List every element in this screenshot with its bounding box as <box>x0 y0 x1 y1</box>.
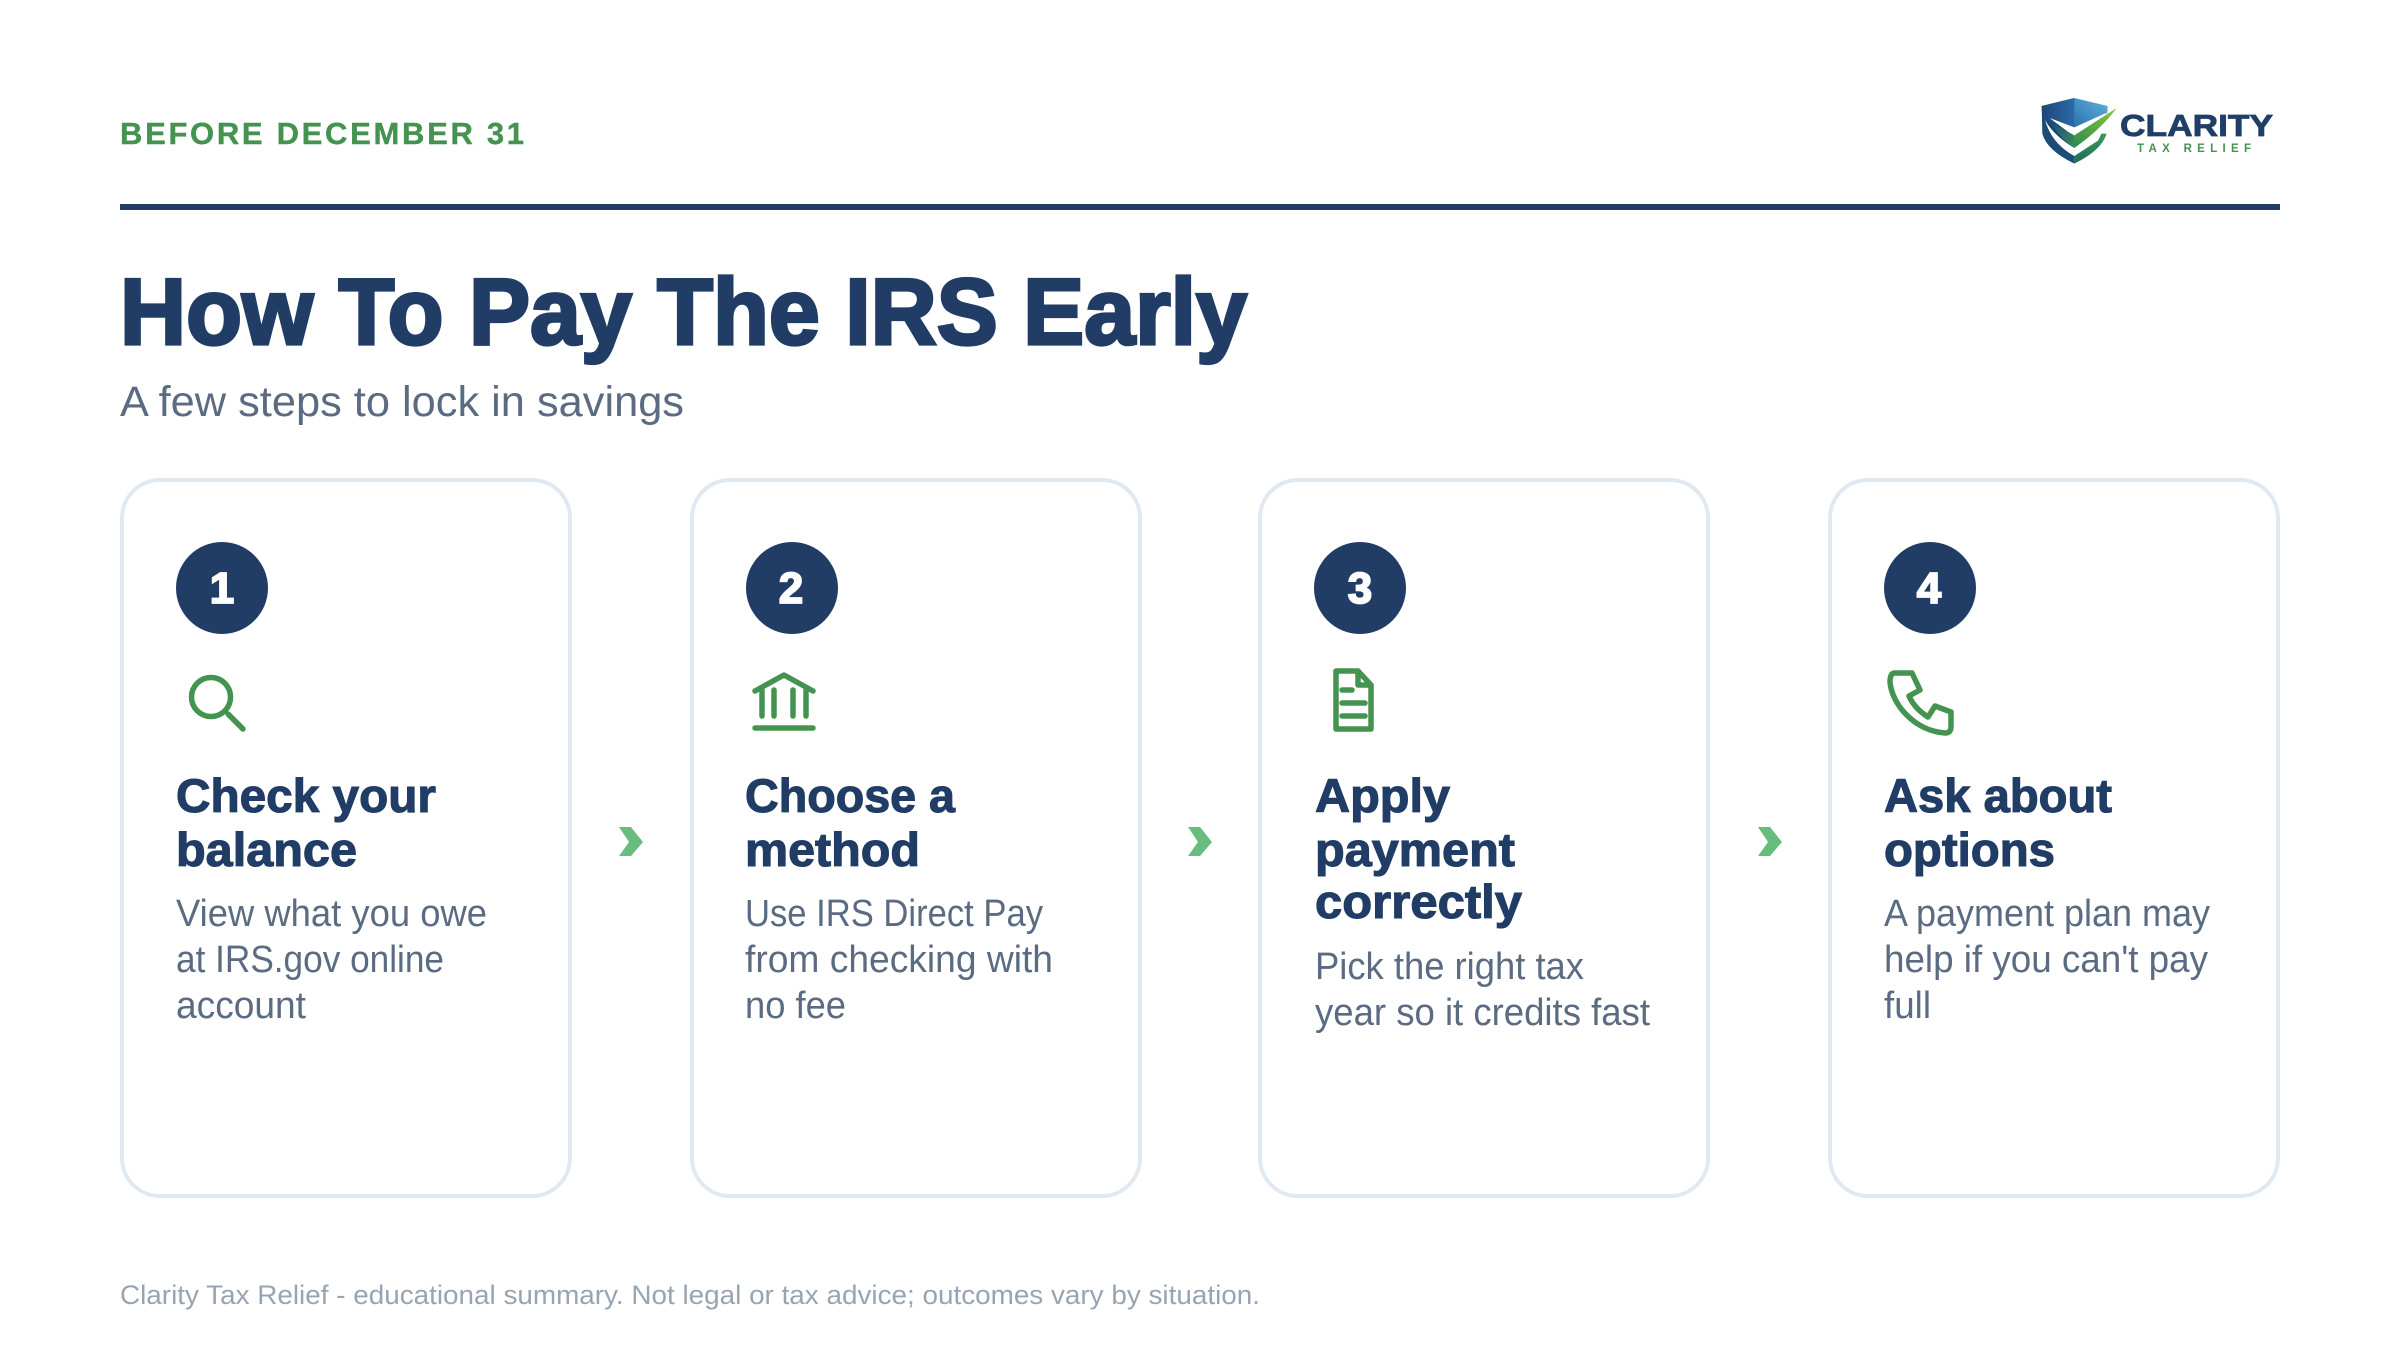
heading: payment <box>1315 823 1515 876</box>
description: A payment plan may <box>1884 893 2210 935</box>
step number 3: 3 <box>1348 564 1372 613</box>
heading <box>745 769 956 876</box>
heading: correctly <box>1315 875 1522 928</box>
header rule <box>120 204 2280 210</box>
eyebrow: before december 31: BEFORE DECEMBER 31 <box>120 116 524 151</box>
description: year so it credits fast <box>1315 992 1650 1034</box>
heading: balance <box>176 823 357 876</box>
heading: Choose a <box>745 769 956 822</box>
description <box>1884 893 2210 1027</box>
logo: clarity tax relief <box>2042 98 2273 164</box>
heading <box>1884 769 2112 876</box>
description: Use IRS Direct Pay <box>745 893 1043 935</box>
description: help if you can't pay <box>1884 939 2208 981</box>
step number 4: 4 <box>1917 564 1942 613</box>
description: at IRS.gov online <box>176 939 444 981</box>
step number 2: 2 <box>779 564 803 613</box>
panel: step 3 apply payment correctly <box>1260 480 1708 1196</box>
step number 1: 1 <box>210 564 234 613</box>
heading: Ask about <box>1884 769 2112 822</box>
subtitle: A few steps to lock in savings <box>120 378 684 426</box>
title: How To Pay The IRS Early <box>120 259 1247 364</box>
description <box>745 893 1053 1027</box>
description <box>1315 946 1650 1034</box>
description: account <box>176 985 306 1027</box>
heading <box>176 769 436 876</box>
heading: options <box>1884 823 2055 876</box>
panel: step 2 choose a method <box>692 480 1140 1196</box>
heading: method <box>745 823 920 876</box>
step number 1 <box>176 542 268 634</box>
description: Pick the right tax <box>1315 946 1584 988</box>
footer disclaimer: Clarity Tax Relief - educational summary. Not legal or tax advice; outcomes vary by situation. <box>120 1280 1260 1310</box>
icon: bank <box>755 675 813 728</box>
description: from checking with <box>745 939 1053 981</box>
icon: logo shield <box>2042 98 2117 164</box>
arrow 3 to 4 <box>1758 827 1782 856</box>
description: no fee <box>745 985 846 1027</box>
step number 3 <box>1314 542 1406 634</box>
logo wordmark: CLARITY <box>2120 108 2273 143</box>
heading: Apply <box>1315 769 1450 822</box>
description <box>176 893 487 1027</box>
heading: Check your <box>176 769 436 822</box>
description: View what you owe <box>176 893 487 935</box>
panel: step 4 ask about options <box>1830 480 2278 1196</box>
description: full <box>1884 985 1931 1027</box>
arrow 1 to 2 <box>619 827 643 856</box>
icon: phone <box>1890 673 1951 733</box>
heading <box>1315 769 1522 928</box>
step number 2 <box>746 542 838 634</box>
icon: magnifying glass <box>192 678 243 729</box>
logo tagline: TAX RELIEF <box>2137 143 2251 155</box>
step number 4 <box>1884 542 1976 634</box>
icon: document <box>1336 671 1371 729</box>
panel: step 1 check your balance <box>122 480 570 1196</box>
arrow 2 to 3 <box>1188 827 1212 856</box>
